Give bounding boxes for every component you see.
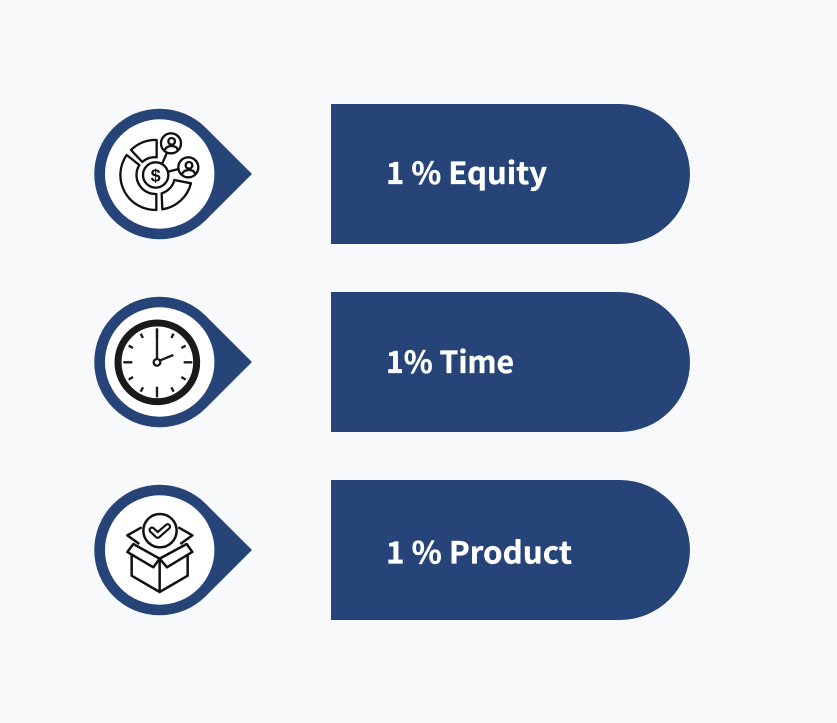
icon: box with check — [127, 514, 192, 592]
row: 1 % Equity — [94, 104, 690, 244]
icon: clock — [118, 323, 197, 402]
label: time: 1% Time — [386, 338, 514, 382]
icon: equity pie chart with people — [120, 133, 198, 210]
row: 1 % Product — [94, 480, 690, 620]
pin badge: time — [94, 297, 252, 427]
label: equity: 1 % Equity — [386, 149, 547, 193]
row: 1% Time — [94, 292, 690, 432]
label: product: 1 % Product — [386, 528, 572, 572]
bar: equity — [331, 104, 690, 244]
bar: time — [331, 292, 690, 432]
pin badge: equity — [94, 109, 252, 239]
pin badge: product — [94, 485, 252, 615]
bar: product — [331, 480, 690, 620]
icon: equity pie chart with people: $ — [151, 165, 161, 185]
